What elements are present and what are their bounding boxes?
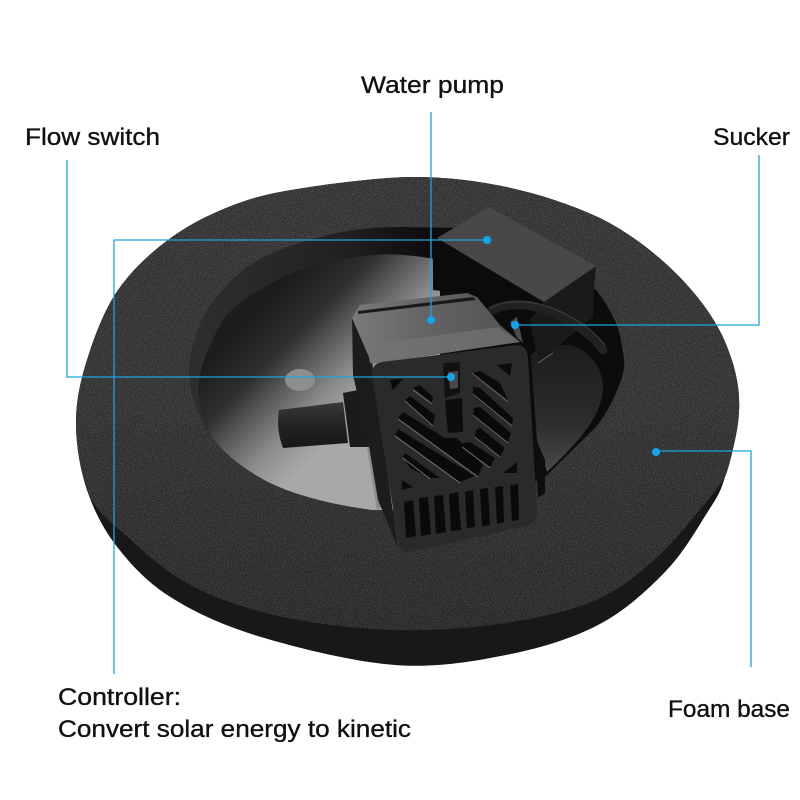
side strip under outlet	[367, 445, 383, 510]
outlet pipe	[278, 388, 372, 448]
pump side	[352, 318, 398, 548]
foam base rim	[76, 177, 739, 666]
marker dots	[427, 236, 660, 456]
pump band	[367, 327, 520, 363]
box top	[437, 207, 596, 302]
rear clip	[535, 437, 545, 498]
label: foam base: Foam base	[668, 696, 790, 723]
foam base	[76, 177, 739, 666]
sucker tip	[510, 317, 523, 343]
pump top	[352, 293, 520, 364]
line: sucker	[515, 155, 759, 325]
intake slots	[404, 484, 519, 538]
outlet tube	[278, 402, 348, 448]
label: water pump: Water pump	[361, 72, 504, 99]
right floor	[530, 345, 603, 472]
line: foam base	[656, 451, 751, 667]
sucker box	[437, 207, 596, 363]
label: controller	[58, 684, 411, 743]
water pump	[352, 293, 537, 552]
label: sucker: Sucker	[713, 124, 790, 151]
flow switch slot	[445, 398, 463, 433]
line: controller	[114, 240, 487, 674]
pump front face	[372, 345, 537, 552]
grille slats	[390, 363, 517, 490]
suction cup on floor	[285, 369, 315, 391]
line: water pump	[430, 112, 432, 320]
box right side	[530, 266, 596, 363]
flow switch knob	[443, 362, 460, 398]
recess wall	[189, 227, 624, 510]
line: flow switch	[67, 160, 451, 377]
label: controller: Controller:	[58, 684, 181, 711]
black shadow behind box	[433, 228, 560, 360]
recess floor	[198, 254, 603, 510]
label: controller: Convert solar energy to kinetic	[58, 716, 411, 743]
grille highlights	[395, 373, 512, 483]
label: flow switch: Flow switch	[25, 124, 160, 151]
foam base top surface	[76, 177, 739, 630]
cable	[489, 302, 605, 350]
outlet collar	[343, 388, 372, 447]
